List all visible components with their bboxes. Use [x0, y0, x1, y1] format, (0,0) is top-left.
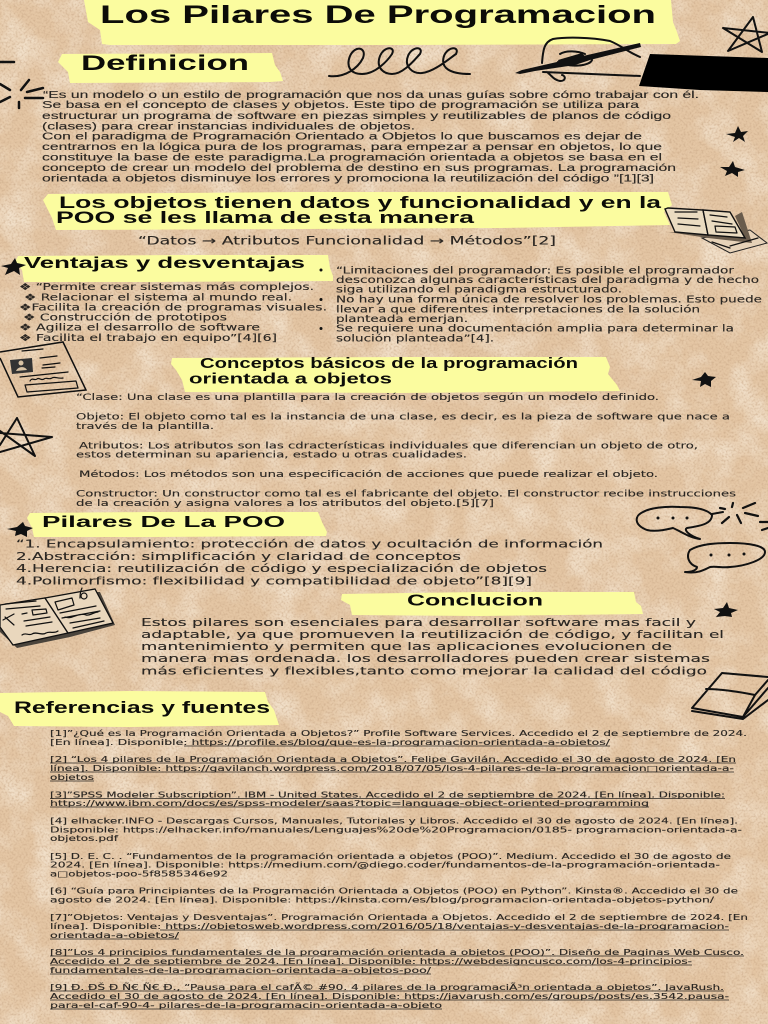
heading: ventajas y desventajas: Ventajas y desventajas — [24, 255, 305, 272]
heading: pilares de la POO — [27, 512, 327, 537]
heading: conclusion: Conclucion — [407, 592, 543, 610]
references list: objetos — [50, 773, 94, 782]
icon: notebook — [692, 673, 768, 719]
text block: conceptos: Métodos: Los métodos son una especificación de acciones que puede realizar el objeto. — [79, 469, 658, 480]
heading: referencias y fuentes: Referencias y fuentes — [14, 699, 270, 717]
text block: conceptos: estos determinan su apariencia, estado u otras cualidades. — [76, 450, 467, 460]
references list — [50, 729, 748, 1010]
references list: [4] elhacker.INFO - Descargas Cursos, Manuales, Tutoriales y Libros. Accedido el 30 de agosto de 2024. [En línea]. — [50, 816, 738, 826]
text block: definition: “Es un modelo o un estilo de programación que nos da unas guías sobre cómo trabajar con él. — [43, 89, 699, 101]
heading: conceptos basicos: Conceptos básicos de la programación — [200, 356, 578, 372]
heading: objects have data and functionality — [43, 192, 672, 230]
icon: speech bubble 2 — [685, 543, 765, 573]
references list: [5] D. E. C. . “Fundamentos de la programación orientada a objetos (POO)”. Medium. Accedido el 30 de agosto de — [50, 852, 731, 861]
icon: star 1 right — [726, 126, 748, 142]
icon: outlined star top right — [723, 17, 768, 52]
text block: conceptos — [76, 392, 737, 509]
text block: conceptos: Objeto: El objeto como tal es la instancia de una clase, es decir, es la pieza de software que nace a — [76, 412, 730, 422]
text block: definition: (clases) para crear instancias individuales de objetos. — [42, 120, 415, 132]
text block: definition: Se basa en el concepto de clases y objetos. Este tipo de programación se utiliza para — [42, 99, 639, 111]
icon: star pilares — [7, 522, 33, 537]
list: pilares: “1. Encapsulamiento: protección de datos y ocultación de información — [16, 538, 603, 550]
heading: Definicion: Definicion — [81, 52, 249, 75]
icon: open book top right — [665, 208, 767, 253]
heading: conclusion — [341, 592, 643, 616]
references list: [9] Ð. ÐŠ Ð Ñ€ Ñ€ Ð., “Pausa para el cafÃ© #90. 4 pilares de la programaciÃ³n orientada a objetos”. JavaRush. — [50, 983, 724, 992]
text: datos and metodos: “Datos → Atributos Funcionalidad → Métodos”[2] — [138, 234, 556, 248]
heading: referencias y fuentes — [0, 691, 279, 727]
references list: orientada-a-objetos/ — [50, 931, 180, 940]
references list: [1]”¿Qué es la Programación Orientada a Objetos?” Profile Software Services. Accedido el 2 de septiembre de 2024. — [50, 729, 747, 738]
list: disadvantages: desconozca algunas características del paradigma y de hecho — [336, 275, 759, 286]
icon: burst lines right — [720, 503, 768, 530]
text block: conceptos: de la creación y asigna valores a los atributos del objeto.[5][7] — [76, 498, 494, 509]
icon: star ventajas — [1, 258, 26, 275]
references list: para-el-caf-90-4- pilares-de-la-programacin-orientada-a-objeto — [50, 1001, 443, 1010]
title: Los Pilares De Programacion — [100, 1, 656, 29]
references list: [3]”SPSS Modeler Subscription”. IBM - United States. Accedido el 2 de septiembre de 2024. [En línea]. Disponible: — [50, 790, 725, 800]
text block: conceptos: través de la plantilla. — [76, 421, 214, 432]
list: disadvantages: solución planteada”[4]. — [336, 334, 494, 344]
list: pilares: 2.Abstracción: simplificación y claridad de conceptos — [16, 550, 461, 563]
references list: 2024. [En línea]. Disponible: https://medium.com/@diego.coder/fundamentos-de-la-programación-orientada- — [50, 860, 720, 870]
list: pilares: 4.Polimorfismo: flexibilidad y compatibilidad de objeto”[8][9] — [16, 574, 532, 588]
list: disadvantages — [320, 266, 762, 344]
heading: objects have data and functionality: Los objetos tienen datos y funcionalidad y en la — [59, 193, 662, 212]
list: pilares — [16, 538, 603, 588]
references list: [8]”Los 4 principios fundamentales de la programación orientada a objetos (POO)”. Diseño de Paginas Web Cusco. — [50, 948, 744, 957]
text block: definition: Con el paradigma de Programación Orientado a Objetos lo que buscamos es dejar de — [42, 130, 642, 142]
heading: Definicion — [58, 52, 283, 83]
references list: [7]”Objetos: Ventajas y Desventajas”. Programación Orientada a Objetos. Accedido el 2 de septiembre de 2024. [En — [50, 913, 748, 922]
list: advantages: ❖ Construcción de prototipos — [23, 312, 227, 324]
references list: línea]. Disponible: https://objetosweb.wordpress.com/2016/05/18/ventajas-y-desventajas-de-la-programacion- — [50, 922, 729, 931]
heading: conceptos basicos — [171, 356, 620, 393]
references list: [En línea]. Disponible: https://profile.es/blog/que-es-la-programacion-orientada-a-objetos/ — [50, 738, 611, 747]
references list: objetos.pdf — [50, 834, 119, 843]
list: advantages: ❖ Facilita el trabajo en equipo”[4][6] — [19, 333, 277, 344]
references list: [6] “Guía para Principiantes de la Programación Orientada a Objetos (POO) en Python”. Kinsta®. Accedido el 30 de — [50, 886, 739, 896]
text block: definition — [42, 89, 699, 184]
text block: definition: centrarnos en la lógica pura de los programas, para empezar a pensar en objetos, lo que — [42, 141, 662, 153]
icon: star conclusion — [714, 602, 738, 617]
list: disadvantages: No hay una forma única de resolver los problemas. Esto puede — [336, 294, 762, 306]
heading: conceptos basicos: orientada a objetos — [189, 372, 392, 388]
text block: definition: estructurar un programa de software en piezas simples y reutilizables de planos de código — [42, 110, 671, 122]
list: disadvantages: planteada emerjan. — [336, 314, 468, 325]
icon: outlined star left — [0, 418, 52, 456]
list: disadvantages: Se requiere una documentación amplia para determinar la — [336, 324, 734, 334]
list: disadvantages: siga utilizando el paradigma estructurado. — [336, 284, 622, 296]
text block: conclusion: Estos pilares son esenciales para desarrollar software mas facil y — [141, 616, 697, 629]
references list: agosto de 2024. [En línea]. Disponible: https://kinsta.com/es/blog/programacion-orientada-objetos-python/ — [50, 896, 715, 904]
text block: definition: orientada a objetos disminuye los errores y promociona la reutilización del código ”[1][3] — [42, 172, 654, 184]
references list: https://www.ibm.com/docs/es/spss-modeler/saas?topic=language-object-oriented-programming — [50, 799, 649, 808]
list: advantages: ❖ “Permite crear sistemas más complejos. — [19, 282, 314, 293]
heading: pilares de la POO: Pilares De La POO — [42, 514, 285, 531]
icon: open book left — [0, 588, 115, 648]
references list: fundamentales-de-la-programacion-orientada-a-objetos-poo/ — [50, 966, 432, 975]
list: advantages — [19, 282, 327, 344]
text block: conceptos: “Clase: Una clase es una plantilla para la creación de objetos según un modelo definido. — [76, 392, 659, 403]
text block: definition: concepto de crear un modelo del problema de destino en sus programas. La programación — [42, 162, 676, 174]
list: pilares: 4.Herencia: reutilización de código y especialización de objetos — [16, 562, 547, 575]
list: disadvantages: “Limitaciones del programador: Es posible el programador — [336, 266, 734, 276]
list: advantages: ❖Facilita la creación de programas visuales. — [19, 302, 327, 314]
references list: a□objetos-poo-5f8585346e92 — [50, 870, 228, 878]
text block: conclusion: adaptable, ya que promueven la reutilización de código, y facilitan el — [141, 628, 724, 641]
icon: id card — [0, 342, 86, 397]
icon: burst lines left — [0, 62, 43, 108]
references list: Accedido el 30 de agosto de 2024. [En línea]. Disponible: https://javarush.com/es/groups/posts/es.3542.pausa- — [50, 992, 729, 1001]
text block: conceptos: Atributos: Los atributos son las cdracterísticas individuales que diferencian un objeto de otro, — [79, 442, 698, 452]
icon: speech bubble 1 — [637, 507, 723, 539]
references list: Disponible: https://elhacker.info/manuales/Lenguajes%20de%20Programacion/0185- programacion-orientada-a- — [50, 826, 742, 834]
title — [84, 0, 680, 45]
text block: conceptos: Constructor: Un constructor como tal es el fabricante del objeto. El constructor recibe instrucciones — [76, 490, 737, 500]
icon: star 2 right — [720, 161, 745, 177]
list: disadvantages: llevar a que diferentes interpretaciones de la solución — [336, 304, 700, 316]
text block: conclusion: manera mas ordenada. los desarrolladores pueden crear sistemas — [141, 652, 710, 665]
icon: scribble loops — [329, 48, 470, 76]
list: advantages: ❖ Agiliza el desarrollo de software — [19, 322, 260, 334]
heading: objects have data and functionality: POO se les llama de esta manera — [56, 208, 475, 227]
icon: star conceptos — [692, 372, 716, 387]
references list: línea]. Disponible: https://gavilanch.wordpress.com/2018/07/05/los-4-pilares-de-la-programacion□orientada-a- — [50, 764, 734, 773]
references list: [2] “Los 4 pilares de la Programación Orientada a Objetos”. Felipe Gavilán. Accedido el 30 de agosto de 2024. [En — [50, 755, 736, 764]
text block: conclusion: más eficientes y flexibles,tanto como mejorar la calidad del código — [141, 664, 707, 678]
heading: ventajas y desventajas — [15, 255, 333, 282]
text block: conclusion — [141, 616, 724, 678]
icon: hand writing with pen — [515, 38, 768, 92]
text block: conclusion: mantenimiento y permiten que las aplicaciones evolucionen de — [141, 640, 672, 653]
references list: Accedido el 2 de septiembre de 2024. [En línea]. Disponible: https://webdesigncusco.com/los-4-principios- — [50, 957, 692, 966]
list: advantages: ❖ Relacionar el sistema al mundo real. — [24, 292, 292, 304]
text block: definition: constituye la base de este paradigma.La programación orientada a objetos se basa en el — [42, 152, 662, 164]
